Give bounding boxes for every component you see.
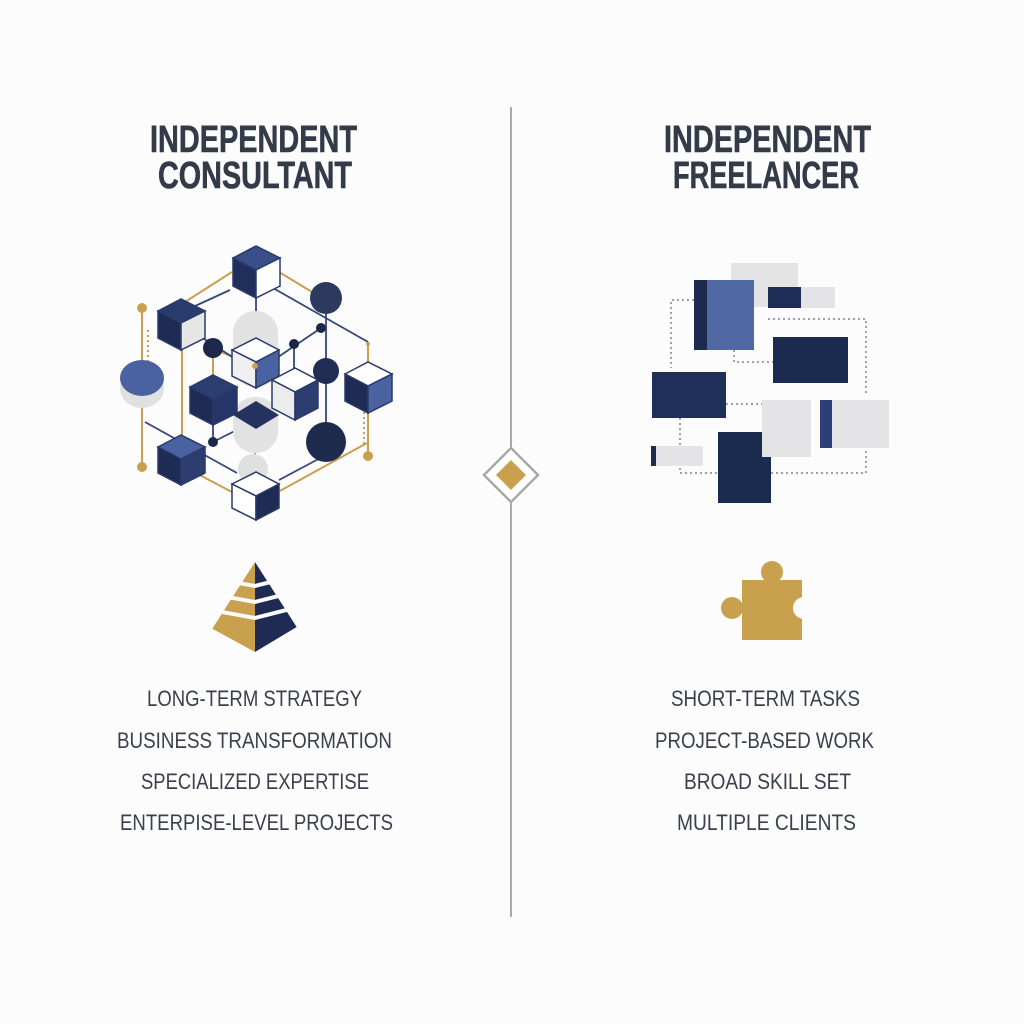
title: independent freelancer: FREELANCER: [673, 155, 859, 197]
gray pills: [233, 311, 278, 387]
network cubes illustration: [120, 246, 392, 520]
list: consultant traits: BUSINESS TRANSFORMATION: [117, 728, 392, 753]
circles: [310, 282, 342, 314]
center diamond: [233, 401, 279, 429]
list: consultant traits: SPECIALIZED EXPERTISE: [141, 769, 369, 794]
cubes: [158, 246, 392, 520]
icon: puzzle piece: [721, 561, 815, 640]
title: independent consultant: INDEPENDENT: [150, 119, 357, 161]
list: freelancer traits: MULTIPLE CLIENTS: [677, 810, 856, 835]
gold dots: [137, 303, 373, 472]
title: independent consultant: CONSULTANT: [158, 155, 352, 197]
list: consultant traits: LONG-TERM STRATEGY: [147, 686, 362, 711]
title: independent freelancer: [664, 119, 871, 197]
divider line: [510, 107, 512, 917]
list: freelancer traits: BROAD SKILL SET: [684, 769, 851, 794]
title: independent freelancer: INDEPENDENT: [664, 119, 871, 161]
freelancer blocks illustration: [651, 263, 889, 503]
left disc: [120, 368, 164, 408]
list: freelancer traits: [655, 686, 874, 835]
list: freelancer traits: PROJECT-BASED WORK: [655, 728, 874, 753]
icon: pyramid: [212, 562, 297, 652]
title: independent consultant: [150, 119, 357, 197]
list: freelancer traits: SHORT-TERM TASKS: [671, 686, 860, 711]
icon: center diamond: [484, 448, 538, 502]
list: consultant traits: ENTERPISE-LEVEL PROJECTS: [120, 810, 393, 835]
list: consultant traits: [117, 686, 393, 835]
